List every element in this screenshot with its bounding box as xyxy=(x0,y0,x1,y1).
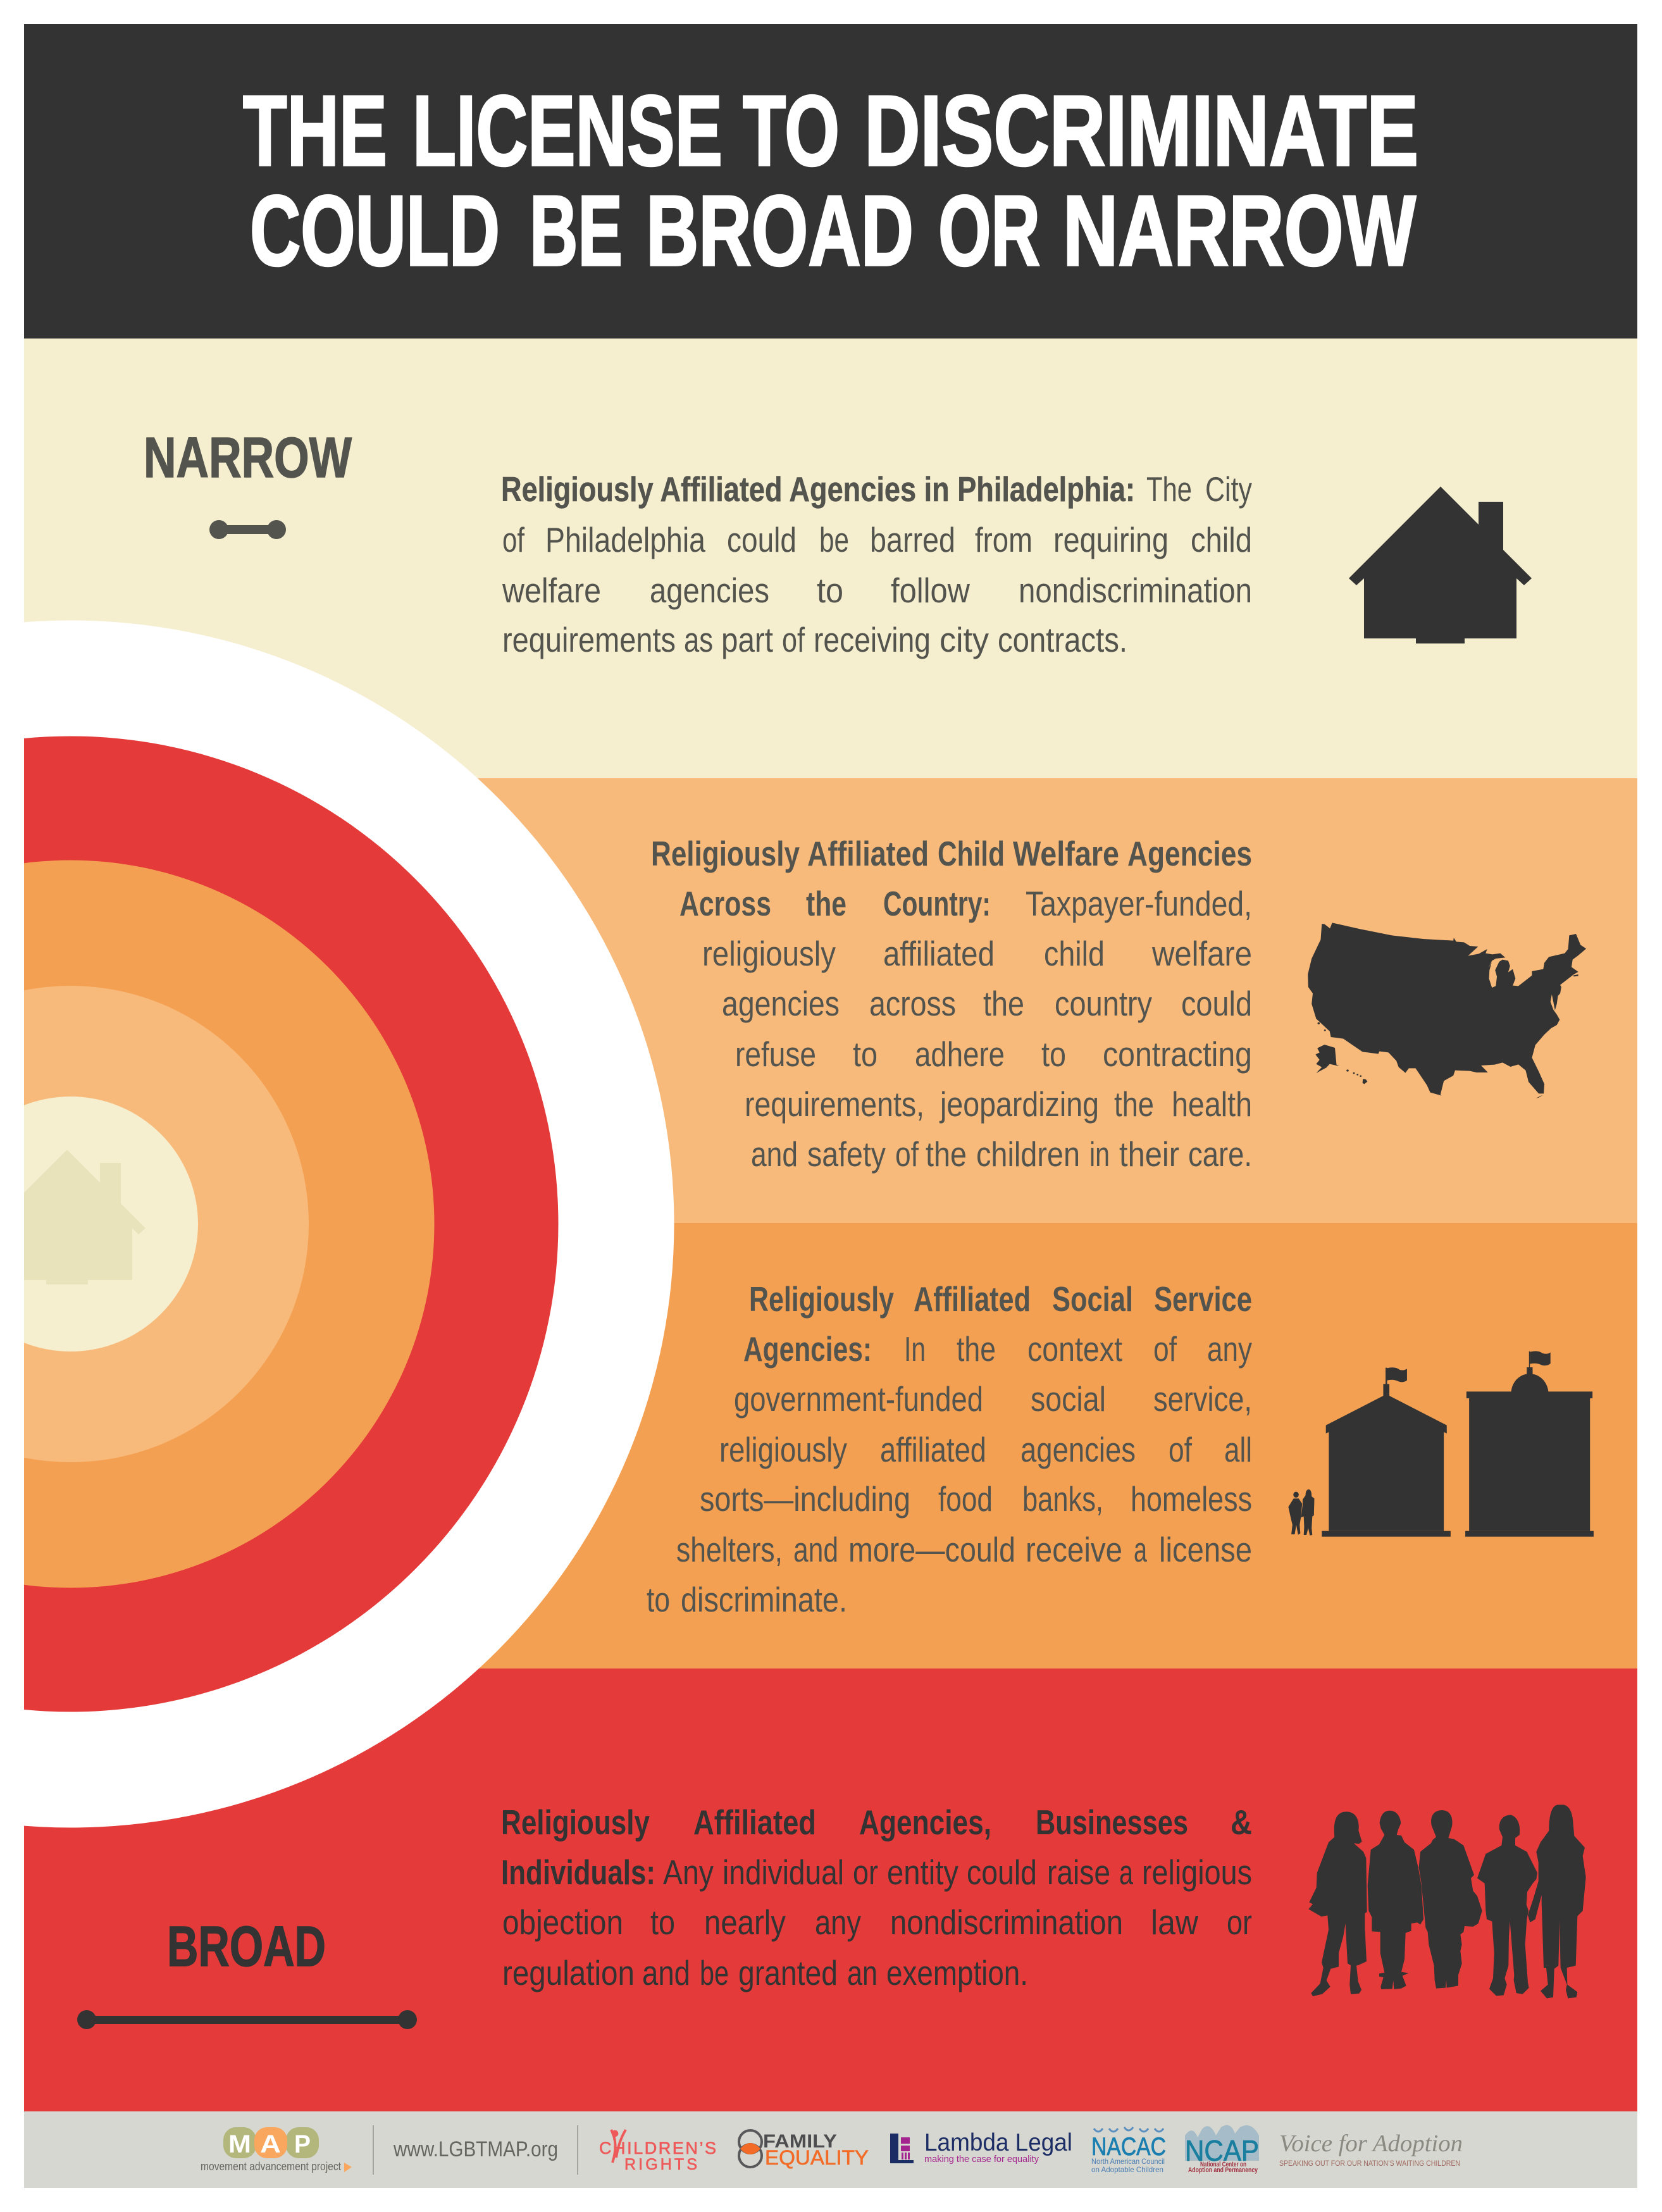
icon: house xyxy=(1349,487,1532,643)
text block: social service agencies: discriminate. xyxy=(681,1580,847,1619)
title banner xyxy=(24,24,1637,339)
text block: child welfare agencies: jeopardizing xyxy=(939,1084,1099,1124)
logo: NCAP: National Center on xyxy=(1200,2161,1246,2168)
logo: MAP: A xyxy=(260,2130,281,2158)
text block: child welfare agencies xyxy=(651,834,1252,1174)
text block: agencies, businesses and individuals: raise xyxy=(1047,1853,1110,1892)
text block: agencies, businesses and individuals: & xyxy=(1231,1803,1252,1842)
text block: social service agencies: banks, xyxy=(1022,1479,1103,1519)
text block: agencies, businesses and individuals: individual xyxy=(722,1853,844,1892)
text block: child welfare agencies: the xyxy=(983,984,1024,1023)
heading: broad: BROAD xyxy=(167,1915,326,1979)
text block: Philadelphia: agencies xyxy=(650,571,769,610)
text block: child welfare agencies: health xyxy=(1172,1084,1252,1124)
text block: social service agencies: agencies xyxy=(1020,1430,1136,1469)
text block: child welfare agencies: country xyxy=(1055,984,1152,1023)
text block: agencies, businesses and individuals: nondiscrimination xyxy=(890,1903,1123,1942)
text block: agencies, businesses and individuals: Businesses xyxy=(1036,1803,1188,1842)
text block: child welfare agencies: welfare xyxy=(1151,934,1252,973)
text block: agencies, businesses and individuals: a xyxy=(1119,1853,1133,1892)
icon: long scope bar xyxy=(77,2010,417,2029)
text block: agencies, businesses and individuals: could xyxy=(967,1853,1037,1892)
text block: social service agencies: shelters, xyxy=(676,1530,783,1569)
text block: child welfare agencies: agencies xyxy=(722,984,840,1023)
text block: Philadelphia: receiving xyxy=(814,620,931,659)
concentric scope circles xyxy=(0,620,674,1827)
text block: Philadelphia: The xyxy=(1146,469,1192,509)
text block: agencies, businesses and individuals: Individuals: xyxy=(501,1853,655,1892)
text block: child welfare agencies: adhere xyxy=(915,1035,1005,1074)
text block: social service agencies: In xyxy=(904,1329,926,1369)
logo: MAP: M xyxy=(228,2130,251,2158)
text block: social service agencies: context xyxy=(1027,1329,1122,1369)
text block: agencies, businesses and individuals: be xyxy=(700,1953,729,1992)
text block: child welfare agencies: the xyxy=(806,884,847,923)
logo: Children's Rights xyxy=(599,2130,716,2173)
text block: Philadelphia: Philadelphia xyxy=(545,520,705,559)
title: TO xyxy=(743,75,840,187)
text block: child welfare agencies: Affiliated xyxy=(807,834,929,873)
logo: Lambda Legal xyxy=(890,2129,1072,2165)
text block: child welfare agencies: could xyxy=(1181,984,1252,1023)
text block: social service agencies: receive xyxy=(1026,1530,1122,1569)
text block: child welfare agencies: across xyxy=(869,984,956,1023)
logo: Family Equality: FAMILY xyxy=(763,2131,837,2152)
text block: child welfare agencies: children xyxy=(976,1134,1080,1174)
text block: Philadelphia: as xyxy=(684,620,713,659)
title: BE xyxy=(530,175,623,287)
text block: social service agencies: service, xyxy=(1153,1379,1252,1419)
title: OR xyxy=(938,175,1040,287)
title xyxy=(243,75,1418,287)
text block: social service agencies: Religiously xyxy=(749,1279,894,1319)
logo: MAP: P xyxy=(294,2130,311,2158)
text block: agencies, businesses and individuals: Agencies, xyxy=(859,1803,991,1842)
text block: agencies, businesses and individuals: regulation xyxy=(502,1953,635,1992)
text block: agencies, businesses and individuals: law xyxy=(1151,1903,1198,1942)
logo: MAP: movement advancement project xyxy=(201,2160,341,2173)
icon: map of the United States xyxy=(1308,923,1586,1098)
text block: social service agencies: to xyxy=(647,1580,670,1619)
logo: NCAP xyxy=(1185,2125,1259,2174)
text block: child welfare agencies: requirements, xyxy=(745,1084,924,1124)
text block: Philadelphia: nondiscrimination xyxy=(1019,571,1252,610)
text block: agencies, businesses and individuals: exemption. xyxy=(886,1953,1028,1992)
icon: faded house in circle centre xyxy=(24,1150,146,1284)
logo: NACAC: NACAC xyxy=(1091,2133,1166,2161)
icon: short scope bar xyxy=(209,520,286,539)
text block: Philadelphia: follow xyxy=(891,571,970,610)
text block: agencies, businesses and individuals: Affiliated xyxy=(693,1803,816,1842)
text block: child welfare agencies: the xyxy=(926,1134,967,1174)
text block: social service agencies: religiously xyxy=(719,1430,847,1469)
text block: Philadelphia: from xyxy=(975,520,1033,559)
logo: MAP xyxy=(201,2127,352,2173)
text block: social service agencies: Affiliated xyxy=(914,1279,1031,1319)
text block: social service agencies: all xyxy=(1224,1430,1252,1469)
text block: child welfare agencies: Taxpayer-funded, xyxy=(1026,884,1252,923)
footer strip xyxy=(24,2111,1637,2188)
text block: Philadelphia: barred xyxy=(870,520,955,559)
text block: Philadelphia: could xyxy=(727,520,797,559)
text block: Philadelphia: contracts. xyxy=(998,620,1127,659)
text block: child welfare agencies: Agencies xyxy=(1127,834,1252,873)
text block: Philadelphia: city xyxy=(940,620,989,659)
text block: child welfare agencies: Religiously xyxy=(651,834,800,873)
text block: social service agencies: the xyxy=(957,1329,996,1369)
icon: two buildings with flags and two small people xyxy=(1288,1351,1594,1537)
text block: Philadelphia: welfare xyxy=(502,571,601,610)
panel: narrow band, Philadelphia xyxy=(24,339,1637,778)
text block: child welfare agencies: safety xyxy=(807,1134,886,1174)
text block: Philadelphia: of xyxy=(782,620,805,659)
logo: NACAC: North American Council xyxy=(1091,2157,1165,2166)
text block: agencies, businesses and individuals: to xyxy=(650,1903,675,1942)
text block: social service agencies: license xyxy=(1159,1530,1252,1569)
text block: agencies, businesses and individuals: granted xyxy=(738,1953,838,1992)
text block: child welfare agencies: affiliated xyxy=(883,934,995,973)
title: NARROW xyxy=(1063,175,1416,287)
text block: Philadelphia: of xyxy=(502,520,525,559)
panel: broad band, red xyxy=(24,1668,1637,2111)
text block: Philadelphia xyxy=(501,469,1252,659)
text block: child welfare agencies: to xyxy=(1041,1035,1066,1074)
text block: child welfare agencies: their xyxy=(1119,1134,1179,1174)
logo: NCAP: Adoption and Permanency xyxy=(1188,2166,1258,2174)
title: BROAD xyxy=(646,175,914,287)
text block: child welfare agencies: care. xyxy=(1188,1134,1252,1174)
text block: social service agencies: sorts—including xyxy=(700,1479,910,1519)
text block: Philadelphia: to xyxy=(817,571,843,610)
text block: agencies, businesses and individuals: an xyxy=(847,1953,878,1992)
text block: child welfare agencies: refuse xyxy=(735,1035,816,1074)
title: DISCRIMINATE xyxy=(864,75,1418,187)
text block: child welfare agencies: Country: xyxy=(883,884,991,923)
text block: social service agencies: food xyxy=(938,1479,993,1519)
text block: child welfare agencies: contracting xyxy=(1103,1035,1252,1074)
text block: social service agencies: any xyxy=(1207,1329,1252,1369)
text block: social service agencies: Agencies: xyxy=(743,1329,872,1369)
text block: child welfare agencies: Across xyxy=(679,884,771,923)
icon: group of people silhouettes xyxy=(1308,1805,1586,1998)
website link: www.LGBTMAP.org xyxy=(393,2137,558,2161)
text block: agencies, businesses and individuals: nearly xyxy=(704,1903,786,1942)
text block: agencies, businesses and individuals: entity xyxy=(887,1853,958,1892)
text block: child welfare agencies: religiously xyxy=(702,934,836,973)
panel: child welfare band xyxy=(24,778,1637,1223)
text block: child welfare agencies: to xyxy=(853,1035,878,1074)
text block: agencies, businesses and individuals xyxy=(501,1803,1252,1992)
logo: Family Equality: EQUALITY xyxy=(765,2146,869,2169)
panel: social service band xyxy=(24,1223,1637,1668)
text block: social service agencies: more—could xyxy=(848,1530,1015,1569)
logo: Lambda Legal: Lambda Legal xyxy=(924,2129,1072,2156)
logo: Family Equality xyxy=(739,2130,869,2169)
text block: agencies, businesses and individuals: or xyxy=(1227,1903,1252,1942)
text block: agencies, businesses and individuals: Religiously xyxy=(501,1803,650,1842)
text block: child welfare agencies: of xyxy=(895,1134,919,1174)
text block: social service agencies: a xyxy=(1134,1530,1147,1569)
text block: Philadelphia: part xyxy=(721,620,773,659)
text block: agencies, businesses and individuals: any xyxy=(815,1903,861,1942)
title: LICENSE xyxy=(412,75,722,187)
text block: social service agencies: and xyxy=(793,1530,838,1569)
logo: Children's Rights: CHILDREN’S xyxy=(599,2139,716,2158)
text block: social service agencies xyxy=(647,1279,1252,1619)
text block: agencies, businesses and individuals: religious xyxy=(1142,1853,1252,1892)
text block: Philadelphia: be xyxy=(819,520,849,559)
text block: child welfare agencies: in xyxy=(1089,1134,1110,1174)
title: COULD xyxy=(250,175,500,287)
text block: Philadelphia: Religiously Affiliated Agencies in Philadelphia: xyxy=(501,469,1135,509)
text block: social service agencies: social xyxy=(1031,1379,1106,1419)
logo: Voice for Adoption: SPEAKING OUT FOR OUR NATION’S WAITING CHILDREN xyxy=(1279,2159,1460,2168)
text block: child welfare agencies: Welfare xyxy=(1013,834,1119,873)
text block: social service agencies: Social xyxy=(1052,1279,1133,1319)
logo: Voice for Adoption xyxy=(1279,2130,1463,2168)
logo: NACAC xyxy=(1091,2127,1166,2174)
text block: agencies, businesses and individuals: and xyxy=(642,1953,690,1992)
text block: Philadelphia: City xyxy=(1205,469,1252,509)
logo: Children's Rights: RIGHTS xyxy=(624,2156,697,2173)
text block: social service agencies: of xyxy=(1169,1430,1193,1469)
text block: social service agencies: government-funded xyxy=(734,1379,983,1419)
text block: Philadelphia: child xyxy=(1191,520,1252,559)
logo: NCAP: NCAP xyxy=(1185,2134,1259,2167)
text block: child welfare agencies: child xyxy=(1044,934,1105,973)
text block: child welfare agencies: Child xyxy=(938,834,1005,873)
title: THE xyxy=(243,75,387,187)
text block: agencies, businesses and individuals: or xyxy=(853,1853,878,1892)
logo: Lambda Legal: making the case for equality xyxy=(924,2154,1039,2165)
text block: child welfare agencies: the xyxy=(1114,1084,1154,1124)
text block: child welfare agencies: and xyxy=(751,1134,798,1174)
logo: NACAC: on Adoptable Children xyxy=(1091,2165,1163,2174)
text block: social service agencies: Service xyxy=(1154,1279,1252,1319)
text block: Philadelphia: requirements xyxy=(502,620,676,659)
logo: Voice for Adoption: Voice for Adoption xyxy=(1279,2130,1463,2157)
text block: Philadelphia: requiring xyxy=(1053,520,1169,559)
heading: narrow: NARROW xyxy=(144,426,352,490)
text block: social service agencies: affiliated xyxy=(880,1430,986,1469)
text block: social service agencies: homeless xyxy=(1131,1479,1252,1519)
text block: social service agencies: of xyxy=(1153,1329,1177,1369)
text block: agencies, businesses and individuals: Any xyxy=(663,1853,714,1892)
text block: agencies, businesses and individuals: objection xyxy=(502,1903,623,1942)
